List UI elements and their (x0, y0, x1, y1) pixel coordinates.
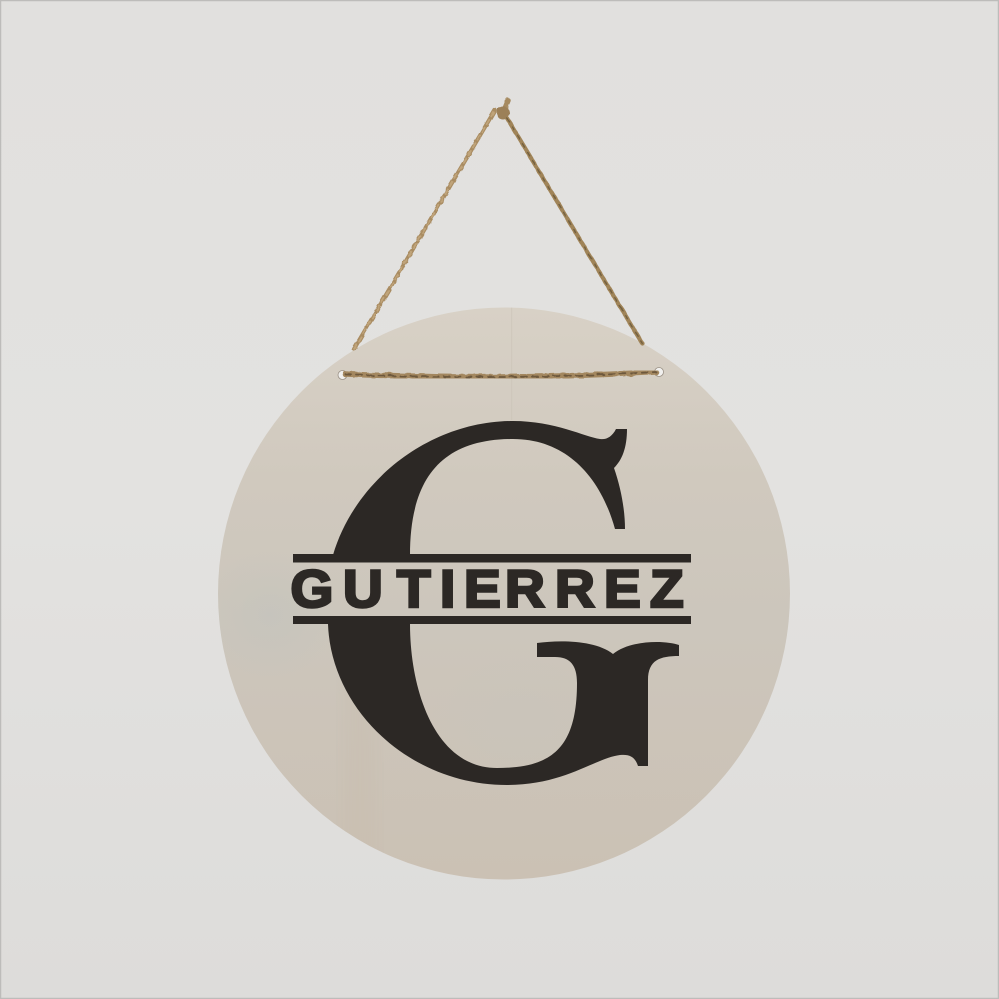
rope knot (496, 106, 510, 120)
rope: hanging loop (354, 100, 642, 349)
wooden disc (200, 300, 790, 880)
family name: GUTIERREZ (291, 560, 684, 619)
G upper part (333, 421, 627, 555)
monogram letter G (328, 421, 679, 785)
lower divider bar (293, 616, 691, 624)
mounting holes (338, 368, 664, 380)
rope: horizontal front strand (345, 372, 656, 377)
G lower part (328, 624, 679, 785)
upper divider bar (293, 554, 691, 562)
